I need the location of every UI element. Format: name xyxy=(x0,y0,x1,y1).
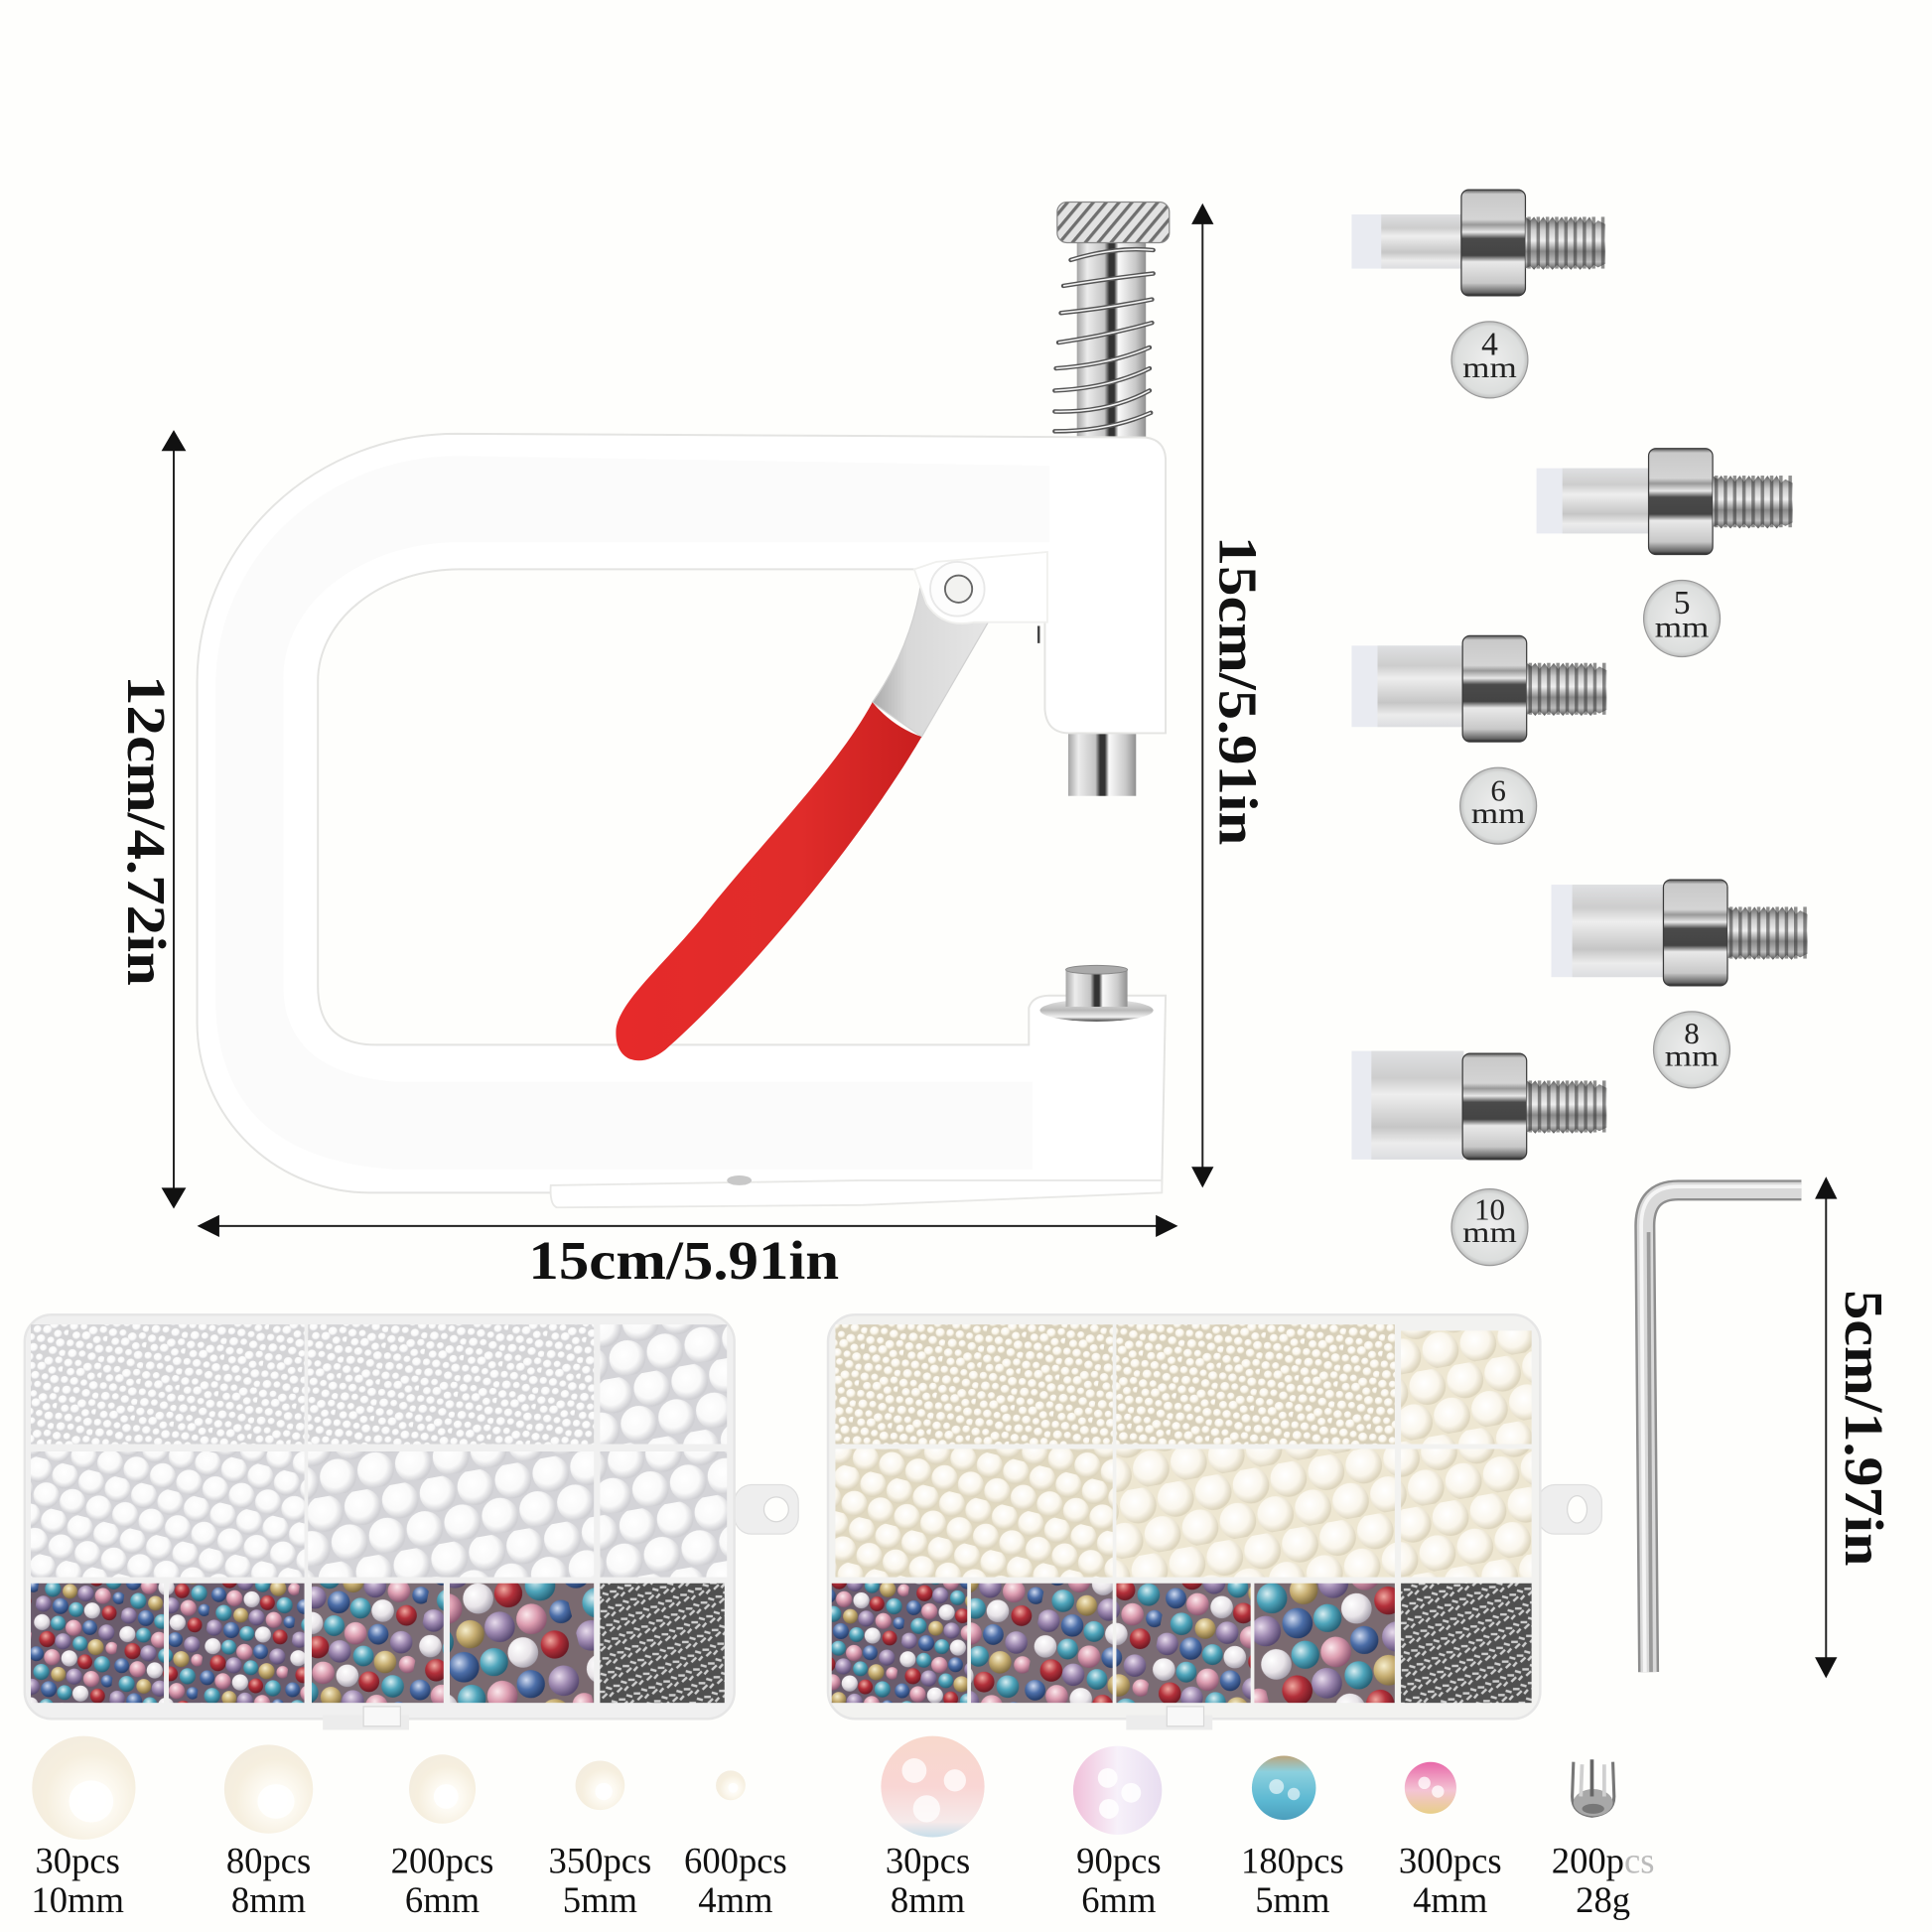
badge 6mm xyxy=(1460,767,1537,844)
dimension label: 12cm: 12cm/4.72in xyxy=(116,675,177,986)
quantity labels: 180pcs xyxy=(1241,1840,1344,1880)
quantity labels: 28g xyxy=(1576,1879,1630,1920)
quantity labels: 5mm xyxy=(563,1879,637,1920)
badge 8mm: mm xyxy=(1665,1040,1719,1073)
badge 8mm xyxy=(1654,1012,1729,1088)
quantity labels: 200pcs xyxy=(391,1840,493,1880)
quantity labels: 350pcs xyxy=(549,1840,651,1880)
quantity labels xyxy=(31,1840,1654,1920)
bead box: cream xyxy=(828,1314,1601,1729)
dimension label: 15cm height: 15cm/5.91in xyxy=(1208,536,1269,845)
quantity labels: 80pcs xyxy=(226,1840,311,1880)
badge 5mm xyxy=(1644,581,1721,656)
rainbow pearl 8mm xyxy=(881,1736,985,1837)
quantity labels: 300pcs xyxy=(1399,1840,1502,1880)
quantity labels: 8mm xyxy=(231,1879,306,1920)
hex key wrench xyxy=(1641,1186,1801,1672)
dimension arrow: tool height xyxy=(162,430,186,1208)
pearl sample 10mm xyxy=(32,1736,136,1840)
quantity labels: 6mm xyxy=(1081,1879,1157,1920)
bead setter tool xyxy=(198,203,1170,1207)
white box compartments xyxy=(31,1324,727,1703)
rainbow pearl 6mm xyxy=(1073,1746,1162,1835)
tool frame xyxy=(198,434,1166,1192)
dimension arrow: tool width xyxy=(198,1215,1177,1237)
tool base foot xyxy=(551,1175,1162,1207)
die 8mm xyxy=(1552,880,1808,986)
die 5mm xyxy=(1537,449,1793,554)
pearl sample 6mm xyxy=(409,1754,476,1824)
die 10mm xyxy=(1351,1051,1606,1160)
tool spring plunger xyxy=(1054,203,1170,443)
badge 8mm: 8 xyxy=(1684,1016,1700,1050)
rainbow pearl 4mm xyxy=(1405,1762,1456,1814)
die 4mm xyxy=(1351,190,1605,296)
cream box compartments xyxy=(832,1324,1532,1703)
badge 6mm: 6 xyxy=(1490,773,1506,808)
quantity labels: 200pcs xyxy=(1552,1840,1654,1880)
badge 4mm: 4 xyxy=(1481,326,1498,362)
quantity labels: 600pcs xyxy=(684,1840,787,1880)
rainbow pearl 5mm xyxy=(1252,1756,1315,1820)
tool lower punch xyxy=(1068,727,1136,796)
silver lever xyxy=(873,579,988,737)
quantity labels: 10mm xyxy=(31,1879,124,1920)
badge 4mm: mm xyxy=(1462,351,1517,384)
quantity labels: 5mm xyxy=(1255,1879,1330,1920)
badge 6mm: mm xyxy=(1471,797,1525,830)
quantity labels: 90pcs xyxy=(1076,1840,1162,1880)
quantity labels: 4mm xyxy=(698,1879,773,1920)
badge 4mm xyxy=(1451,322,1528,398)
pearl sample 8mm xyxy=(224,1744,313,1834)
badge 5mm: mm xyxy=(1655,612,1709,644)
latch detail xyxy=(1037,625,1039,643)
quantity labels: 6mm xyxy=(405,1879,480,1920)
tool lower anvil xyxy=(1039,965,1154,1022)
dimension label: 15cm width: 15cm/5.91in xyxy=(528,1230,839,1291)
dimension arrow: wrench xyxy=(1815,1176,1837,1678)
badge 10mm xyxy=(1451,1189,1528,1266)
metal prong sample xyxy=(1573,1759,1614,1816)
pearl sample 5mm xyxy=(576,1760,624,1810)
badge 10mm: 10 xyxy=(1474,1192,1505,1227)
dimension label: 5cm: 5cm/1.97in xyxy=(1834,1290,1894,1566)
quantity labels: 8mm xyxy=(891,1879,965,1920)
bead box: white xyxy=(25,1314,798,1729)
pivot band xyxy=(914,552,1047,623)
quantity labels: 30pcs xyxy=(35,1840,120,1880)
quantity labels: 4mm xyxy=(1413,1879,1487,1920)
badge 10mm: mm xyxy=(1462,1216,1517,1249)
badge 5mm: 5 xyxy=(1674,585,1690,621)
pearl sample 4mm xyxy=(716,1770,746,1800)
red handle xyxy=(616,702,921,1060)
quantity labels: 30pcs xyxy=(886,1840,970,1880)
dimension arrow: tool total height xyxy=(1191,204,1213,1187)
die 6mm xyxy=(1351,635,1606,742)
